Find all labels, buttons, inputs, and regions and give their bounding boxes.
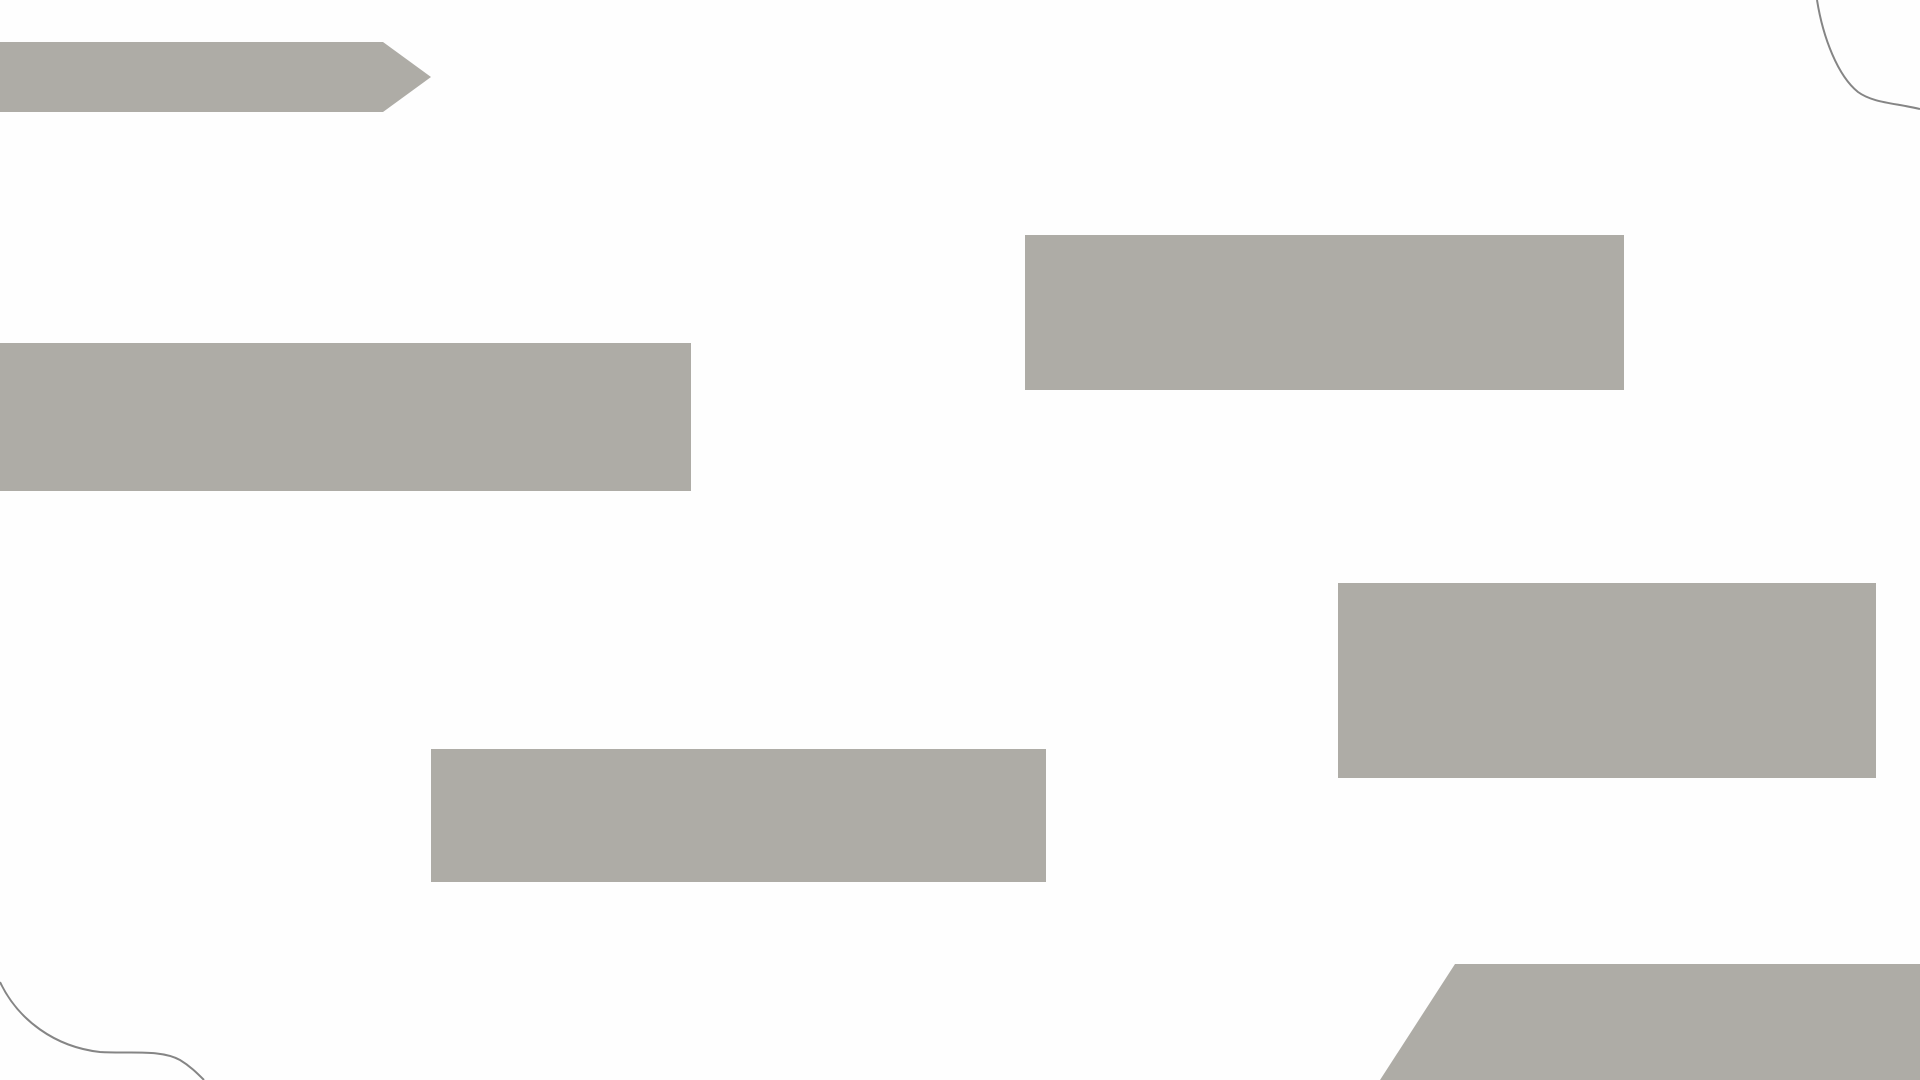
panel: middle right placeholder [1338,583,1876,778]
curve: top right corner [1817,0,1920,109]
panel: lower centre placeholder [431,749,1046,882]
panel: upper right placeholder [1025,235,1624,390]
slanted banner: bottom right [1380,964,1920,1080]
curve: bottom left corner [0,982,204,1080]
arrow banner: top left [0,42,431,112]
panel: middle left placeholder [0,343,691,491]
